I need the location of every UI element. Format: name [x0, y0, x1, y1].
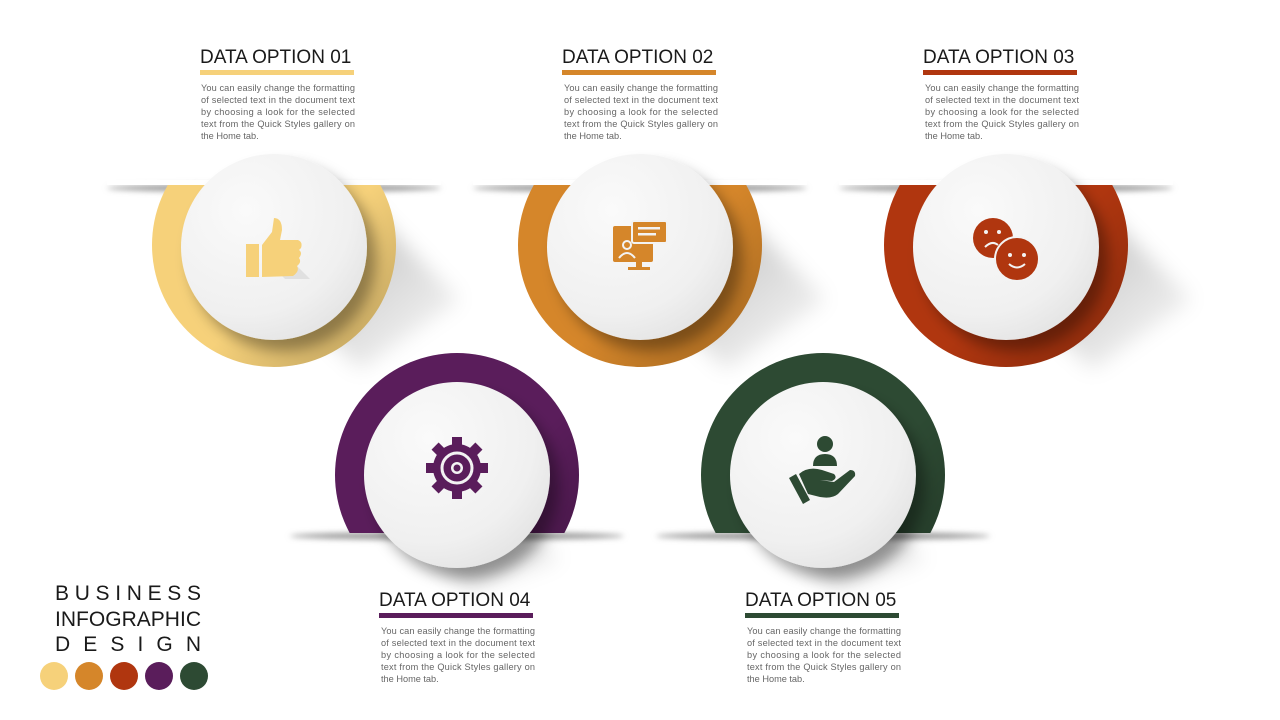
shelf 02 — [473, 184, 807, 192]
item 05 — [656, 353, 990, 597]
ring 03 — [884, 185, 1186, 368]
ring 02 — [518, 185, 820, 368]
text block 05: text from the Quick Styles gallery on — [747, 662, 901, 672]
text block 01: the Home tab. — [201, 131, 259, 141]
white circle 02 — [547, 154, 733, 340]
text block 02 — [562, 47, 718, 141]
text block 01: by choosing a look for the selected — [201, 107, 355, 117]
item 03 — [839, 154, 1186, 368]
shelf 04 — [290, 532, 624, 540]
icon: thumbs up — [246, 218, 310, 279]
icon: hand with person — [789, 436, 855, 504]
text block 04: DATA OPTION 04 — [379, 590, 531, 611]
shelf 01 — [107, 184, 441, 192]
text block 02: You can easily change the formatting — [564, 83, 718, 93]
text block 01: text from the Quick Styles gallery on — [201, 119, 355, 129]
text block 04 — [379, 590, 535, 684]
white circle 01 — [181, 154, 367, 340]
text block 01 — [200, 47, 355, 141]
text block 04: of selected text in the document text — [381, 638, 535, 648]
brand title: BUSINESS — [55, 582, 201, 605]
ring 04 — [335, 353, 579, 533]
text block 04: text from the Quick Styles gallery on — [381, 662, 535, 672]
icon: faces — [973, 218, 1039, 281]
ring 05 — [701, 353, 945, 533]
long shadow 04 — [400, 500, 560, 590]
shelf 03 — [839, 184, 1173, 192]
text block 04: by choosing a look for the selected — [381, 650, 535, 660]
white circle 04 — [364, 382, 550, 568]
text block 05 — [745, 590, 901, 684]
brand title: DESIGN — [55, 633, 201, 656]
shelf 05 — [656, 532, 990, 540]
long shadow 05 — [766, 500, 926, 590]
brand title: INFOGRAPHIC — [55, 608, 201, 631]
white circle 03 — [913, 154, 1099, 340]
white circle 05 — [730, 382, 916, 568]
text block 01: You can easily change the formatting — [201, 83, 355, 93]
item 01 — [107, 154, 454, 368]
color dots — [40, 662, 208, 690]
brand title — [55, 582, 201, 656]
icon: monitor with chat — [613, 221, 667, 270]
text block 04: You can easily change the formatting — [381, 626, 535, 636]
text block 05: of selected text in the document text — [747, 638, 901, 648]
text block 05: the Home tab. — [747, 674, 805, 684]
item 02 — [473, 154, 820, 368]
ring 01 — [152, 185, 454, 368]
text block 03: You can easily change the formatting — [925, 83, 1079, 93]
text block 03: the Home tab. — [925, 131, 983, 141]
text block 05: You can easily change the formatting — [747, 626, 901, 636]
text block 04: the Home tab. — [381, 674, 439, 684]
text block 03: text from the Quick Styles gallery on — [925, 119, 1079, 129]
text block 05: DATA OPTION 05 — [745, 590, 896, 611]
text block 05: by choosing a look for the selected — [747, 650, 901, 660]
text block 02: of selected text in the document text — [564, 95, 718, 105]
text block 02: DATA OPTION 02 — [562, 47, 713, 68]
item 04 — [290, 353, 624, 597]
text block 03: DATA OPTION 03 — [923, 47, 1074, 68]
text block 02: the Home tab. — [564, 131, 622, 141]
text block 03: by choosing a look for the selected — [925, 107, 1079, 117]
text block 02: text from the Quick Styles gallery on — [564, 119, 718, 129]
text block 02: by choosing a look for the selected — [564, 107, 718, 117]
text block 01: of selected text in the document text — [201, 95, 355, 105]
text block 01: DATA OPTION 01 — [200, 47, 351, 68]
text block 03: of selected text in the document text — [925, 95, 1079, 105]
text block 03 — [923, 47, 1079, 141]
icon: gear — [426, 437, 488, 499]
